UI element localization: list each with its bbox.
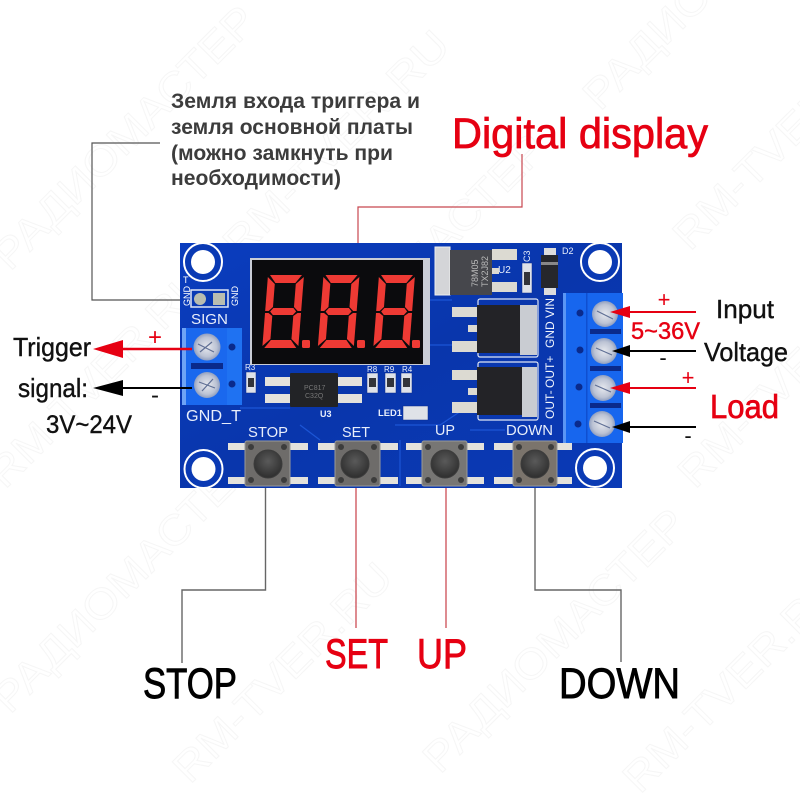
power terminal silkscreen labels bbox=[543, 298, 557, 419]
silkscreen labels: U2 bbox=[498, 265, 511, 276]
watermark: RM-TVER.RU bbox=[213, 21, 458, 266]
power terminal silkscreen labels: VIN bbox=[543, 298, 557, 318]
silkscreen labels: R3 bbox=[245, 363, 256, 372]
trigger polarity marks bbox=[148, 324, 162, 409]
silkscreen labels: LED1 bbox=[378, 408, 402, 418]
label: Load: Load bbox=[710, 388, 779, 425]
silkscreen labels: SET bbox=[342, 424, 370, 441]
leader line: STOP bbox=[182, 488, 266, 663]
right polarity marks: + bbox=[682, 365, 694, 390]
optocoupler U3 bbox=[265, 373, 362, 407]
digit 1 bbox=[262, 275, 304, 348]
left trigger terminal block bbox=[182, 328, 242, 405]
STOP button bbox=[228, 441, 308, 486]
arrow: trigger plus bbox=[93, 340, 192, 358]
label: input voltage: 5~36V bbox=[631, 318, 700, 345]
label: trigger signal bbox=[13, 332, 132, 439]
diode D2 bbox=[541, 248, 558, 295]
regulator U2: 78M05 bbox=[470, 259, 480, 287]
ground jumper header: T bbox=[183, 275, 189, 285]
digit 3 bbox=[373, 275, 415, 348]
silkscreen labels: C3 bbox=[522, 250, 532, 262]
silkscreen labels: U3 bbox=[320, 409, 332, 419]
ground jumper header: GND bbox=[182, 286, 192, 306]
right polarity marks: - bbox=[659, 345, 667, 370]
annotation: Russian ground note: Земля входа триггера и bbox=[171, 90, 420, 113]
SET button bbox=[318, 441, 398, 486]
small resistors bbox=[246, 263, 532, 420]
digit 2 bbox=[318, 275, 360, 348]
label: trigger signal: signal: bbox=[18, 373, 88, 403]
right polarity marks bbox=[658, 287, 694, 448]
arrow: input minus bbox=[612, 345, 696, 357]
silkscreen labels: DOWN bbox=[506, 422, 553, 439]
label: input voltage: Voltage bbox=[704, 337, 788, 367]
MOSFET top bbox=[452, 299, 538, 357]
annotation: Russian ground note bbox=[171, 90, 420, 190]
optocoupler U3: C32Q bbox=[305, 393, 324, 400]
silkscreen labels: R8 bbox=[367, 365, 378, 374]
heading: Digital display: Digital display bbox=[452, 110, 708, 158]
label: input voltage: Input bbox=[716, 294, 775, 324]
leader line: digital display bbox=[358, 154, 522, 260]
label: DOWN: DOWN bbox=[559, 660, 680, 708]
optocoupler U3: PC817 bbox=[304, 385, 326, 392]
trigger polarity marks: - bbox=[151, 382, 159, 409]
annotation: Russian ground note: (можно замкнуть при bbox=[171, 142, 393, 165]
watermark: РАДИОМАСТЕР bbox=[273, 124, 555, 406]
silkscreen labels: UP bbox=[435, 422, 455, 439]
power terminal silkscreen labels: OUT+ bbox=[543, 356, 557, 388]
regulator U2 bbox=[435, 247, 517, 295]
label: input voltage bbox=[631, 294, 788, 367]
board substrate bbox=[180, 243, 622, 488]
arrow: input plus bbox=[610, 306, 696, 318]
annotation: Russian ground note: необходимости) bbox=[171, 167, 341, 190]
silkscreen labels: D2 bbox=[562, 246, 574, 256]
label: SET: SET bbox=[325, 630, 388, 677]
regulator U2: TX2J82 bbox=[480, 256, 490, 287]
UP button bbox=[406, 441, 484, 486]
silkscreen labels bbox=[186, 246, 574, 441]
leader line: SET bbox=[355, 488, 357, 628]
silkscreen labels: R9 bbox=[384, 365, 395, 374]
trigger polarity marks: + bbox=[148, 324, 162, 351]
power terminal silkscreen labels: GND bbox=[543, 321, 557, 348]
three digit seven segment display bbox=[250, 258, 430, 365]
arrow: trigger minus bbox=[93, 380, 192, 396]
label: trigger signal: Trigger bbox=[13, 332, 91, 362]
label: UP: UP bbox=[417, 630, 467, 677]
silkscreen labels: R4 bbox=[402, 365, 413, 374]
decimal points bbox=[302, 340, 420, 348]
power terminal silkscreen labels: OUT- bbox=[543, 390, 557, 419]
right polarity marks: + bbox=[658, 287, 670, 312]
DOWN button bbox=[494, 441, 572, 486]
annotation: Russian ground note: земля основной платы bbox=[171, 116, 413, 139]
watermark: РАДИОМАСТЕР bbox=[413, 499, 695, 781]
ground jumper header: GND bbox=[230, 286, 240, 306]
watermark: RM-TVER.RU bbox=[163, 553, 401, 791]
right polarity marks: - bbox=[684, 423, 692, 448]
right power terminal block bbox=[563, 293, 623, 443]
silkscreen labels: STOP bbox=[248, 424, 288, 441]
silkscreen labels: GND_T bbox=[186, 408, 241, 425]
board traces bbox=[240, 300, 505, 486]
leader line: ground note bbox=[92, 143, 180, 300]
silkscreen labels: SIGN bbox=[191, 311, 228, 328]
arrow: load minus bbox=[612, 421, 696, 433]
mounting holes bbox=[184, 243, 619, 488]
circuit board bbox=[180, 243, 623, 488]
leader line: UP bbox=[445, 488, 447, 628]
label: STOP: STOP bbox=[143, 660, 237, 708]
arrow: load plus bbox=[610, 382, 696, 394]
ground jumper header bbox=[182, 275, 240, 307]
label: trigger signal: 3V~24V bbox=[46, 411, 132, 439]
MOSFET bottom bbox=[452, 362, 538, 420]
leader line: DOWN bbox=[535, 488, 621, 662]
